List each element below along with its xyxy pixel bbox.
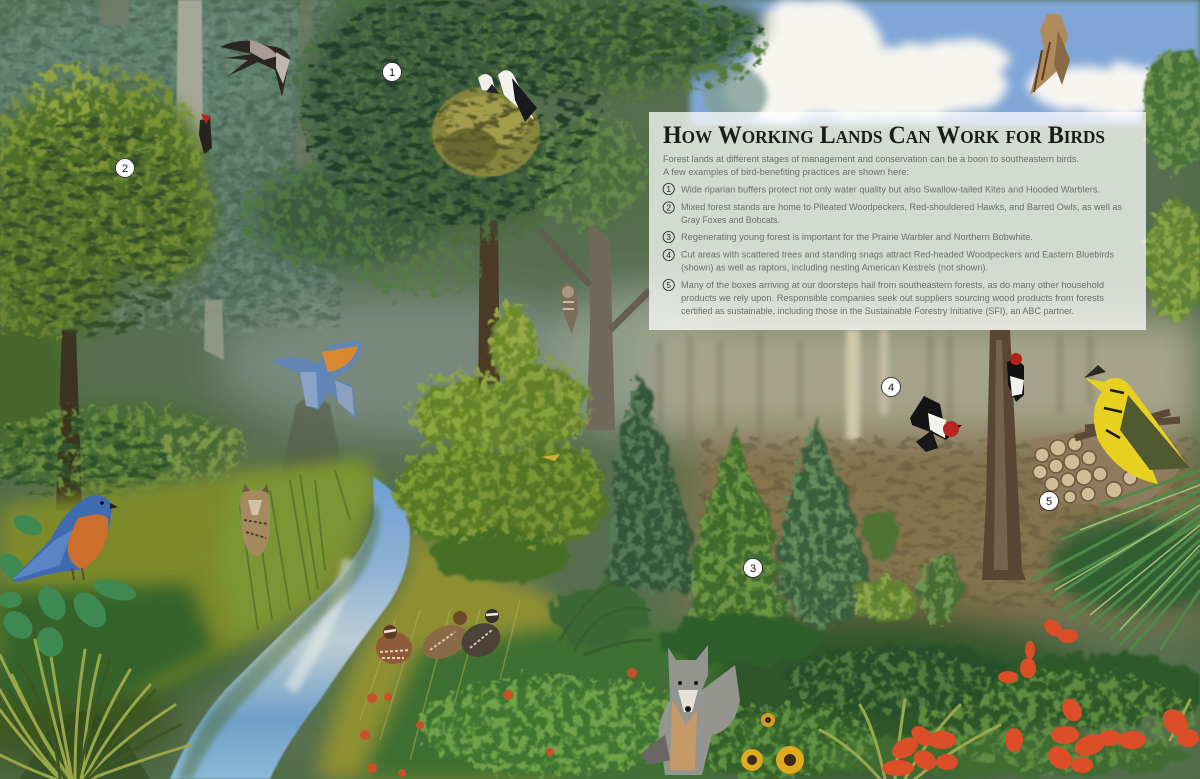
- bird: flying swallow-tailed kite: [220, 40, 290, 97]
- list item 2: 2: [666, 204, 671, 212]
- palmetto: bottom left: [0, 640, 190, 779]
- pine branches: right edge: [1030, 48, 1200, 650]
- intro text: [663, 154, 1079, 178]
- nest: [432, 87, 540, 177]
- bird: flying bluebird: [272, 340, 362, 420]
- flowers: yellow and red wildflowers: [360, 668, 804, 777]
- bird: red-headed woodpecker on snag: [1007, 353, 1024, 402]
- list item 2: Mixed forest stands are home to Pileated Woodpeckers, Red-shouldered Hawks, and Barred Owls, as well as: [681, 202, 1122, 213]
- background conifer texture: upper left: [0, 0, 340, 330]
- list item 2: [663, 202, 1122, 226]
- list item 4: (shown) as well as raptors, including nesting American Kestrels (not shown).: [681, 262, 988, 274]
- number marker 1: [382, 62, 402, 82]
- list item 5: Many of the boxes arriving at our doorsteps hail from southeastern forests, as do many other household: [681, 280, 1104, 291]
- clouds: [720, 0, 1180, 125]
- distant mist trees and stumps: [660, 67, 1090, 445]
- list item 3: Regenerating young forest is important for the Prairie Warbler and Northern Bobwhite.: [681, 232, 1033, 243]
- grass bank: right: [315, 520, 720, 779]
- heading: How Working Lands Can Work for Birds: [663, 122, 1105, 149]
- stream: [170, 477, 410, 779]
- animal: bobcat: [240, 484, 270, 556]
- bird: hawk in flight: [1030, 14, 1070, 95]
- list item 5: [663, 279, 1104, 317]
- conifer: young larch: [690, 430, 785, 625]
- sky: [690, 0, 1200, 125]
- tree: left broadleaf: [0, 63, 250, 510]
- young broadleaf tree: [396, 303, 607, 583]
- number marker 3: 3: [750, 563, 756, 575]
- bird: prairie warbler: [1084, 365, 1190, 484]
- list item 2: Gray Foxes and Bobcats.: [681, 215, 780, 226]
- number marker 1: 1: [389, 67, 395, 79]
- list item 3: 3: [666, 233, 671, 242]
- list item 4: 4: [666, 251, 671, 260]
- list item 4: Cut areas with scattered trees and standing snags attract Red-headed Woodpeckers and Eastern Bluebirds: [681, 250, 1114, 260]
- bird: pileated woodpecker: [199, 114, 212, 154]
- list item 5: products we rely upon. Responsible companies seek out suppliers sourcing wood products from forests: [681, 293, 1104, 304]
- list item 5: 5: [666, 281, 671, 290]
- bird: red-headed woodpecker flying: [910, 396, 962, 452]
- log pile: [1030, 412, 1180, 510]
- bird: swallow-tailed kites on nest: [478, 70, 537, 122]
- list item 4: [663, 249, 1114, 274]
- birds: northern bobwhite quail group: [376, 609, 506, 666]
- number marker 3: [744, 558, 762, 578]
- quail 3: [456, 609, 506, 663]
- leaves by perched bluebird: [0, 511, 139, 661]
- number marker 5: [1040, 492, 1058, 510]
- nest twig texture: [434, 89, 538, 175]
- background trunks: [100, 0, 345, 480]
- foreground shrubs: [420, 585, 1200, 777]
- list item 1: 1: [666, 185, 671, 194]
- tree: central tall pine: [240, 0, 770, 430]
- intro text: A few examples of bird-benefiting practices are shown here:: [663, 167, 909, 178]
- bird: perched eastern bluebird: [12, 495, 118, 582]
- cut area shrubs: [855, 509, 960, 625]
- number marker 4: 4: [888, 382, 894, 394]
- number marker 2: [116, 158, 134, 178]
- flowers: orange trumpet creeper: [882, 616, 1199, 776]
- bird: yellow sprig warbler: [541, 454, 560, 461]
- list item 5: certified as sustainable, including those in the Sustainable Forestry Initiative (SFI), an ABC partner.: [681, 306, 1074, 317]
- list item 1: Wide riparian buffers protect not only water quality but also Swallow-tailed Kites and Hooded Warblers.: [681, 184, 1100, 196]
- panel: how working lands can work for birds: [649, 112, 1146, 330]
- cut area brush texture: [700, 440, 1200, 610]
- number marker 2: 2: [122, 163, 128, 175]
- conifer: rounded cedar: [778, 418, 865, 628]
- quail 1: [376, 625, 412, 664]
- snag with woodpecker: [982, 330, 1026, 580]
- palmetto: bottom centre right: [560, 580, 1190, 779]
- intro text: Forest lands at different stages of management and conservation can be a boon to southeastern birds.: [663, 154, 1079, 165]
- conifer: tall dark: [610, 375, 700, 590]
- quail 2: [417, 611, 473, 666]
- animal: gray fox: [640, 645, 740, 775]
- grass bank: left: [0, 460, 378, 700]
- number marker 5: 5: [1046, 496, 1052, 508]
- bird: barred owl: [560, 283, 578, 334]
- number marker 4: [882, 378, 900, 396]
